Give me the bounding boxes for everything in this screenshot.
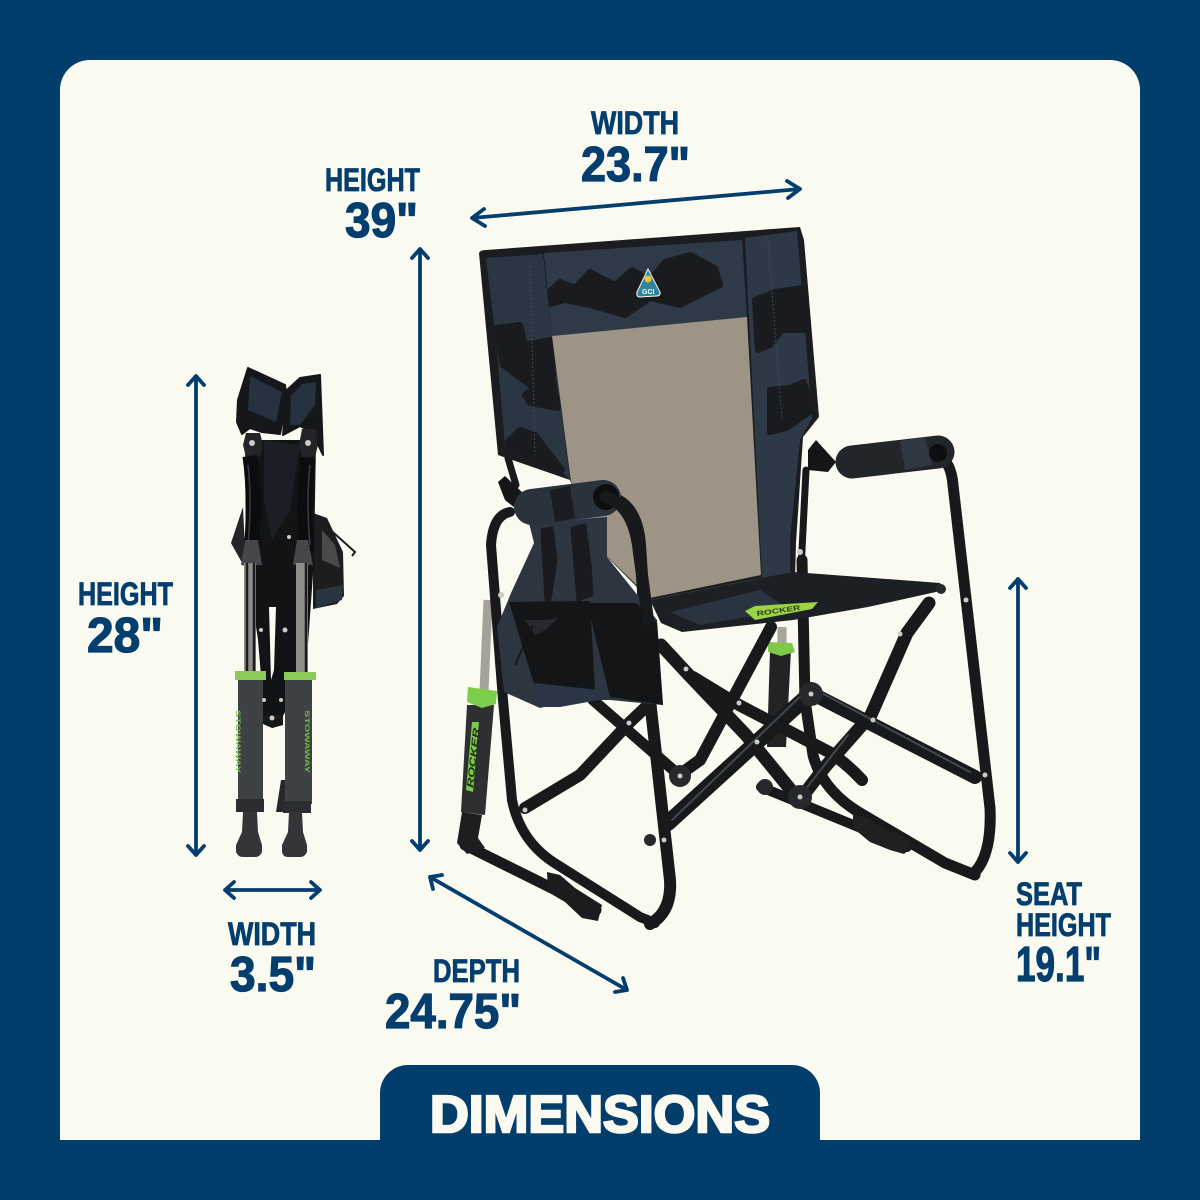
label: folded width: 3.5"	[230, 948, 316, 1002]
folded: rod shadow	[247, 563, 306, 672]
back camo: left dark patches	[496, 325, 562, 470]
main chair	[457, 227, 990, 924]
front-left armrest	[532, 484, 619, 522]
heading tab: dimensions	[380, 1065, 820, 1144]
folded: side pouch	[313, 513, 355, 609]
folded: right fabric top	[283, 375, 323, 455]
front-left frame	[610, 497, 670, 924]
label: folded width: WIDTH	[228, 916, 316, 952]
arrow: seat height	[1010, 579, 1026, 862]
folded: hinge blocks	[243, 429, 318, 457]
right arm hinge	[808, 440, 836, 472]
arrow: folded height	[188, 376, 204, 855]
logo: GCI badge: GCI	[642, 289, 654, 296]
arrow: main chair height	[412, 249, 428, 850]
left arm hinge	[498, 476, 525, 508]
back camo: left panel	[486, 254, 570, 480]
back mesh panel	[552, 317, 761, 598]
label: depth	[385, 953, 521, 1039]
back camo: right dark patches	[755, 288, 812, 432]
label: folded height: HEIGHT	[78, 576, 173, 612]
folded: bolts	[248, 440, 311, 810]
arrow: folded width	[225, 882, 320, 898]
label: main chair width: 23.7"	[581, 138, 690, 192]
label: depth: 24.75"	[385, 985, 521, 1039]
front piston: ROCKER	[465, 727, 481, 788]
arrow: main chair width	[472, 181, 800, 226]
heading tab: dimensions: DIMENSIONS	[430, 1086, 770, 1144]
rear foot bracket	[853, 815, 911, 854]
back camo: top band	[544, 240, 747, 336]
hanging organizer	[497, 517, 663, 708]
folded: lower cylinders	[238, 680, 312, 804]
rear green piston	[767, 627, 795, 747]
folded: central dark body	[245, 440, 316, 728]
folded: lower hinge plate	[263, 714, 283, 728]
folded chair	[231, 368, 355, 857]
seat: ROCKER	[756, 605, 801, 618]
folded: gap in frame	[269, 607, 276, 680]
folded: stowaway text right: STOWAWAY	[303, 710, 310, 774]
frame highlights	[672, 689, 970, 820]
folding cross frame	[525, 603, 975, 847]
seat	[650, 572, 946, 632]
chrome piston rod front	[484, 600, 488, 692]
folded: feet	[236, 812, 307, 857]
rear seat uprights and right frame	[508, 458, 990, 875]
label: folded height	[78, 576, 173, 663]
lower left rail	[465, 845, 596, 910]
label: folded width	[228, 916, 316, 1002]
folded: frame tubes	[250, 456, 308, 552]
back camo: top band dark	[546, 255, 720, 315]
right armrest	[852, 437, 947, 470]
folded: bottom collars	[236, 799, 311, 813]
label: main chair width	[581, 105, 690, 192]
folded: small rear piece	[276, 780, 285, 812]
label: seat height	[1016, 876, 1111, 992]
label: folded height: 28"	[87, 609, 163, 663]
label: main chair height	[325, 162, 420, 248]
folded: inner fabric	[264, 440, 300, 540]
label: seat height: 19.1"	[1016, 938, 1101, 992]
folded: grey collars	[241, 540, 313, 565]
label: seat height: HEIGHT	[1016, 907, 1111, 943]
folded: stowaway text left: STOWAWAY	[234, 710, 241, 774]
arrow: depth	[430, 875, 627, 992]
stitch lines	[530, 240, 782, 455]
label: main chair height: 39"	[345, 194, 418, 248]
folded: left fabric flap	[231, 507, 246, 570]
front-left frame top	[606, 497, 648, 620]
folded: tube highlights	[248, 465, 310, 545]
logo: GCI badge	[637, 269, 660, 297]
folded: fabric highlights	[248, 376, 316, 425]
seat back	[479, 227, 819, 600]
folded: green rings	[235, 671, 316, 680]
frame bolts	[498, 549, 988, 842]
label: main chair width: WIDTH	[591, 105, 679, 141]
label: seat height: SEAT	[1016, 876, 1082, 912]
back camo: right panel	[745, 231, 812, 578]
label: depth: DEPTH	[433, 953, 520, 989]
rear left frame	[491, 512, 655, 923]
frame nodes	[644, 682, 823, 846]
front piston	[457, 687, 497, 854]
label: main chair height: HEIGHT	[325, 162, 420, 198]
folded: chrome rods	[250, 563, 302, 672]
foot bracket	[547, 872, 602, 921]
folded: left fabric top	[237, 368, 287, 434]
